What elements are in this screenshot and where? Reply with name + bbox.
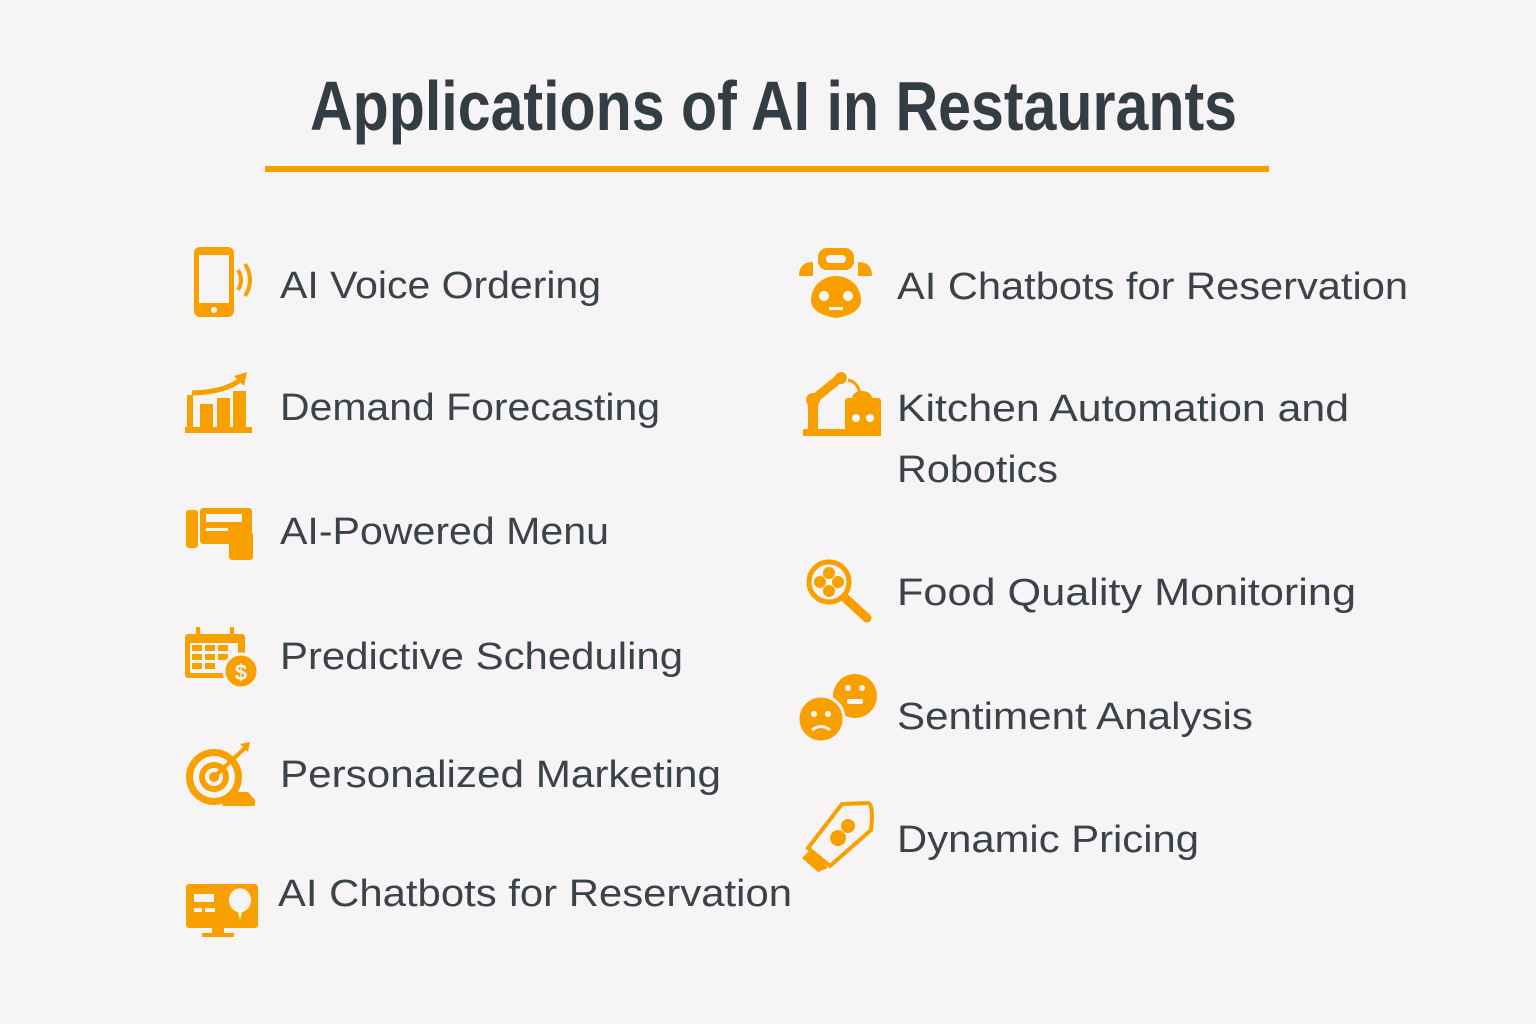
icon: phone voice (194, 247, 250, 317)
item: Personalized Marketing: Personalized Marketing (280, 754, 721, 796)
icon: menu (186, 508, 253, 560)
item: Dynamic Pricing: Dynamic Pricing (897, 819, 1199, 861)
item: Kitchen Automation and Robotics: Kitchen Automation and (897, 388, 1349, 430)
icon: sentiment faces (798, 674, 877, 742)
title: Applications of AI in Restaurants (310, 67, 1237, 145)
icon: magnifier food (809, 562, 867, 618)
icon: calendar dollar (185, 627, 258, 688)
item: Sentiment Analysis: Sentiment Analysis (897, 696, 1253, 738)
title underline (265, 166, 1269, 172)
icon: bar chart up (185, 372, 252, 433)
icon: target (186, 742, 255, 806)
icon: chatbot robot (799, 248, 872, 318)
item: Demand Forecasting: Demand Forecasting (280, 387, 660, 429)
item: Kitchen Automation and Robotics: Robotics (897, 449, 1058, 491)
item: AI Chatbots for Reservation (left): AI Chatbots for Reservation (278, 873, 792, 915)
item: AI-Powered Menu: AI-Powered Menu (280, 511, 609, 553)
item: AI Chatbots for Reservation (right): AI Chatbots for Reservation (897, 266, 1408, 308)
item: AI Voice Ordering: AI Voice Ordering (280, 265, 601, 307)
icon: price tag (802, 803, 872, 872)
icon: calendar dollar: $ (235, 660, 247, 685)
item: Food Quality Monitoring: Food Quality Monitoring (897, 572, 1356, 614)
item: Kitchen Automation and Robotics (897, 388, 1349, 491)
item: Predictive Scheduling: Predictive Scheduling (280, 636, 683, 678)
icon: kitchen robot arm (803, 372, 881, 436)
icon: monitor chat (186, 884, 258, 937)
